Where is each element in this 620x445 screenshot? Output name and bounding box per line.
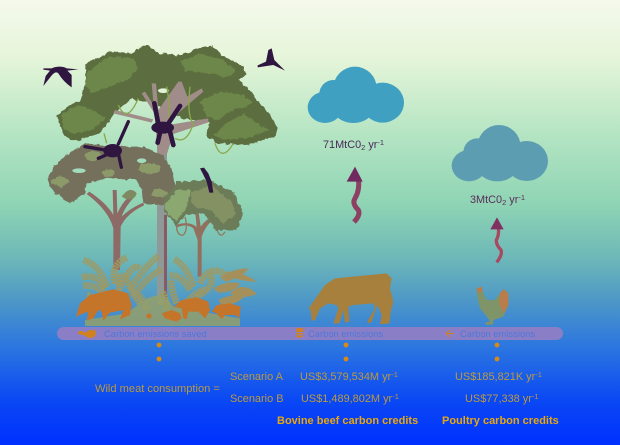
label: bovine emissions value: 2 xyxy=(361,143,365,152)
value: bovine scenario A: -1 xyxy=(391,370,398,379)
silhouette: cow xyxy=(308,273,393,324)
silhouette: small forest animals xyxy=(146,297,241,322)
tree: tall canopy xyxy=(57,45,277,155)
cloud: bovine emissions xyxy=(308,67,404,123)
value: poultry scenario A: -1 xyxy=(535,370,542,379)
canopy branches xyxy=(113,82,208,155)
label: poultry emissions value: -1 xyxy=(518,193,525,202)
summary bar xyxy=(57,327,563,340)
animals: birds and monkeys xyxy=(43,48,285,193)
broad leaves xyxy=(213,268,257,305)
icon: drumstick xyxy=(446,330,454,337)
label: scenario B: Scenario B xyxy=(230,393,284,405)
hanging vines xyxy=(104,87,233,153)
tree: lower right canopy and trunk xyxy=(163,180,243,277)
silhouette: rooster xyxy=(477,287,508,325)
value: poultry scenario B: -1 xyxy=(532,392,539,401)
label: scenario A: Scenario A xyxy=(230,371,284,383)
arrow: poultry emissions rising xyxy=(490,217,504,262)
table: wild meat consumption credits xyxy=(95,370,542,405)
heading: poultry carbon credits: Poultry carbon credits xyxy=(442,415,559,427)
label: bovine emissions value: 71MtC0 xyxy=(323,139,361,151)
ground grass xyxy=(85,293,240,326)
label: poultry emissions value: 2 xyxy=(502,198,506,207)
label: poultry carbon emissions: Carbon emissions xyxy=(460,329,535,339)
sky gap in canopy xyxy=(158,88,169,93)
value: bovine scenario B: -1 xyxy=(392,392,399,401)
tree: lower left canopy and trunk xyxy=(47,143,177,205)
label: bovine emissions value: yr xyxy=(365,139,378,151)
value: poultry scenario B: US$77,338 yr xyxy=(465,393,532,405)
monkey: lower left spider monkey xyxy=(85,122,128,167)
connector dots xyxy=(157,343,499,361)
cloud: poultry emissions xyxy=(452,125,548,181)
bird: large macaw flying left xyxy=(43,67,78,87)
label: carbon emissions saved: Carbon emissions saved xyxy=(104,329,207,339)
icon: wild meat xyxy=(78,329,96,338)
tree: lower left trunk and branches xyxy=(87,190,144,270)
value: bovine scenario A: US$3,579,534M yr xyxy=(300,371,391,383)
understory plants xyxy=(82,256,257,326)
label: bovine carbon emissions: Carbon emissions xyxy=(308,329,383,339)
label: poultry emissions value: 3MtC0 xyxy=(470,194,502,206)
value: poultry scenario A: US$185,821K yr xyxy=(455,371,535,383)
heading: bovine beef carbon credits: Bovine beef carbon credits xyxy=(277,415,418,427)
monkey: upper right spider monkey xyxy=(151,103,180,145)
bird: macaw flying right xyxy=(258,48,285,71)
label: poultry emissions value: yr xyxy=(506,194,519,206)
silhouette: tapir xyxy=(76,289,132,321)
label: wild meat consumption: Wild meat consumption = xyxy=(95,383,220,395)
illustration: rainforest xyxy=(43,45,285,326)
arrow: bovine emissions rising xyxy=(347,167,363,222)
icon: burger xyxy=(296,328,303,338)
value: bovine scenario B: US$1,489,802M yr xyxy=(301,393,392,405)
tree: main trunk xyxy=(157,130,167,305)
label: bovine emissions value: -1 xyxy=(377,138,384,147)
bird: perched curassow xyxy=(200,168,213,193)
sky gaps in lower canopy xyxy=(72,168,86,173)
